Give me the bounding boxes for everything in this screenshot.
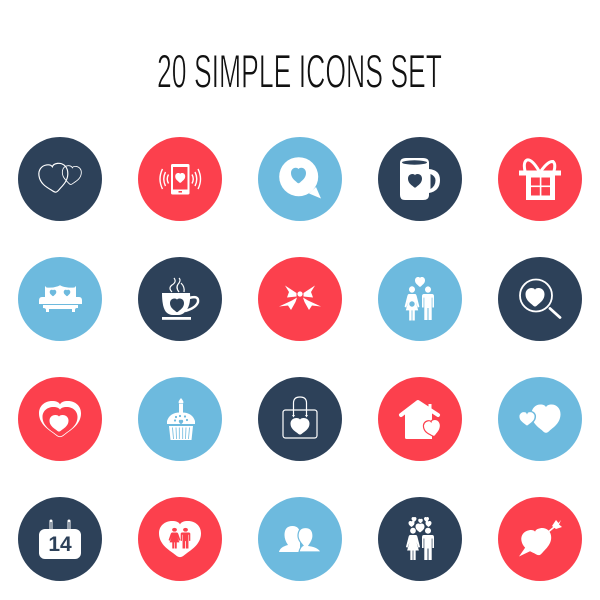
icon: calendar 14 — [18, 497, 102, 581]
icon: magnifier over heart — [498, 257, 582, 341]
icon: phone with heart and signal waves — [138, 137, 222, 221]
icon: birthday cupcake — [138, 377, 222, 461]
icon: couple inside heart — [138, 497, 222, 581]
icon: gift box — [498, 137, 582, 221]
icon: two solid hearts — [498, 377, 582, 461]
icon: ribbon bow — [258, 257, 342, 341]
icon: two outlined hearts — [18, 137, 102, 221]
icon: house with heart — [378, 377, 462, 461]
icon: speech bubble with heart — [258, 137, 342, 221]
icon: coffee cup with heart and steam — [138, 257, 222, 341]
icon: mug with heart — [378, 137, 462, 221]
left user silhouette — [279, 526, 300, 552]
icon: shopping bag with heart — [258, 377, 342, 461]
right user silhouette — [298, 528, 321, 552]
icon: two user silhouettes — [258, 497, 342, 581]
icon: expecting couple with heart — [378, 257, 462, 341]
icon: calendar 14: 14 — [48, 533, 72, 556]
icon: couple with several hearts — [378, 497, 462, 581]
icon: nested hearts — [18, 377, 102, 461]
icon: double bed — [18, 257, 102, 341]
icon: heart pierced by arrow — [498, 497, 582, 581]
